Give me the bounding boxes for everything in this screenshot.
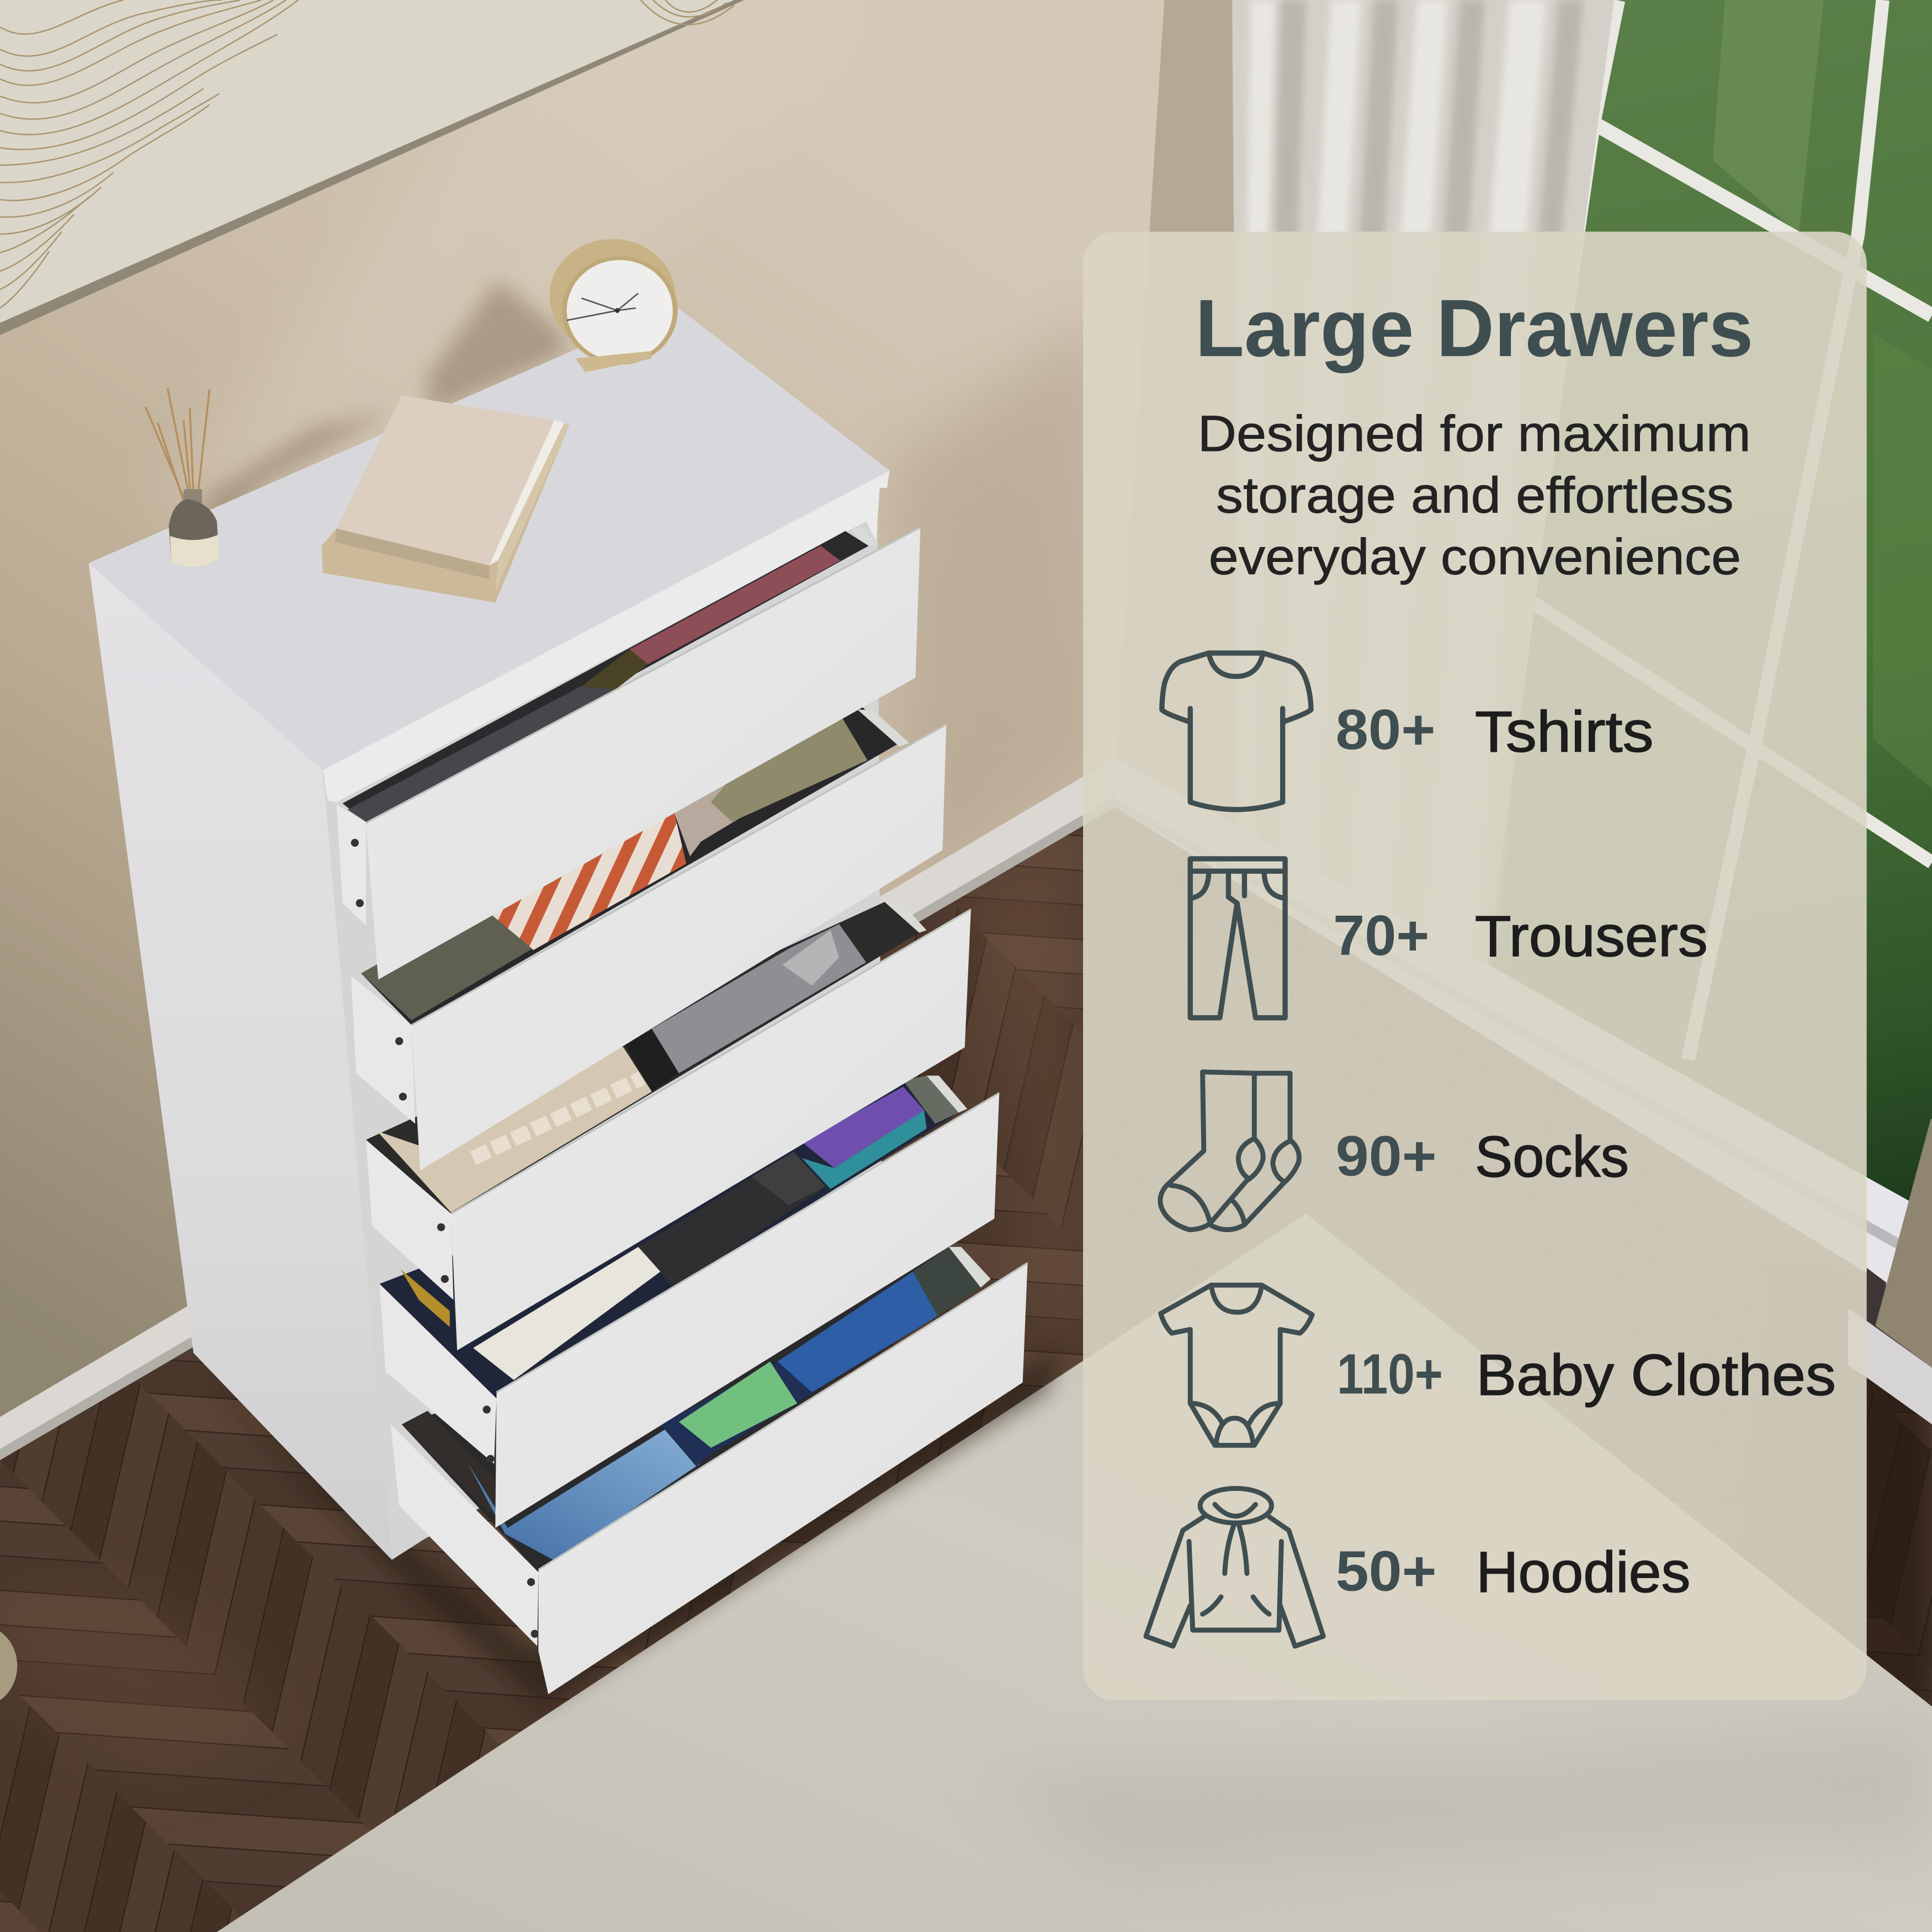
icon: baby bodysuit <box>1161 1285 1312 1445</box>
count: 110+: 110+ <box>1337 1342 1443 1406</box>
label: Tshirts: Tshirts <box>1475 700 1654 765</box>
shadows cast by chest <box>205 280 1060 1707</box>
translucent information panel <box>1083 232 1867 1700</box>
label: Hoodies: Hoodies <box>1476 1540 1690 1605</box>
row: tshirts <box>1162 653 1654 810</box>
chest left side <box>89 563 392 1560</box>
chevron wood floor <box>0 807 1932 1932</box>
count: 50+: 50+ <box>1336 1540 1437 1603</box>
label: Trousers: Trousers <box>1475 904 1708 969</box>
reed diffuser <box>145 388 219 567</box>
count: 90+: 90+ <box>1336 1124 1437 1187</box>
leaning tan panel at right edge <box>1875 1119 1932 1368</box>
icon: t-shirt <box>1162 653 1311 810</box>
chest carcass front <box>318 490 882 1560</box>
window with garden view <box>1472 0 1932 1220</box>
books <box>322 396 569 603</box>
chest top surface <box>89 306 890 770</box>
framed painting <box>0 0 744 335</box>
drawer 5 <box>391 1247 1028 1694</box>
row: trousers <box>1190 859 1708 1018</box>
drawer 2 <box>351 702 946 1171</box>
subtitle: storage and effortless <box>1216 468 1734 524</box>
icon: hoodie <box>1146 1488 1323 1646</box>
label: Baby Clothes: Baby Clothes <box>1476 1343 1836 1408</box>
icon: trousers <box>1190 859 1285 1018</box>
drawer 3 <box>366 902 971 1350</box>
subtitle: everyday convenience <box>1209 529 1741 585</box>
skirting and window sill <box>0 758 1932 1460</box>
chest top front edge <box>323 471 890 802</box>
row: hoodies <box>1146 1488 1690 1646</box>
row: socks <box>1160 1072 1629 1230</box>
side table edge <box>0 1625 17 1707</box>
row: baby clothes <box>1161 1285 1836 1445</box>
drawer 4 <box>380 1076 999 1528</box>
clock <box>550 239 678 372</box>
subtitle: Designed for maximum <box>1198 406 1751 462</box>
curtain <box>1232 0 1614 1035</box>
label: Socks: Socks <box>1475 1125 1629 1190</box>
drawer 1 <box>336 527 920 980</box>
count: 70+: 70+ <box>1333 904 1429 967</box>
chest of drawers <box>89 306 1028 1694</box>
icon: socks <box>1160 1072 1299 1230</box>
subtitle <box>1198 406 1751 585</box>
count: 80+: 80+ <box>1336 698 1435 761</box>
title: Large Drawers <box>1195 283 1753 374</box>
rug <box>217 1214 1932 1932</box>
